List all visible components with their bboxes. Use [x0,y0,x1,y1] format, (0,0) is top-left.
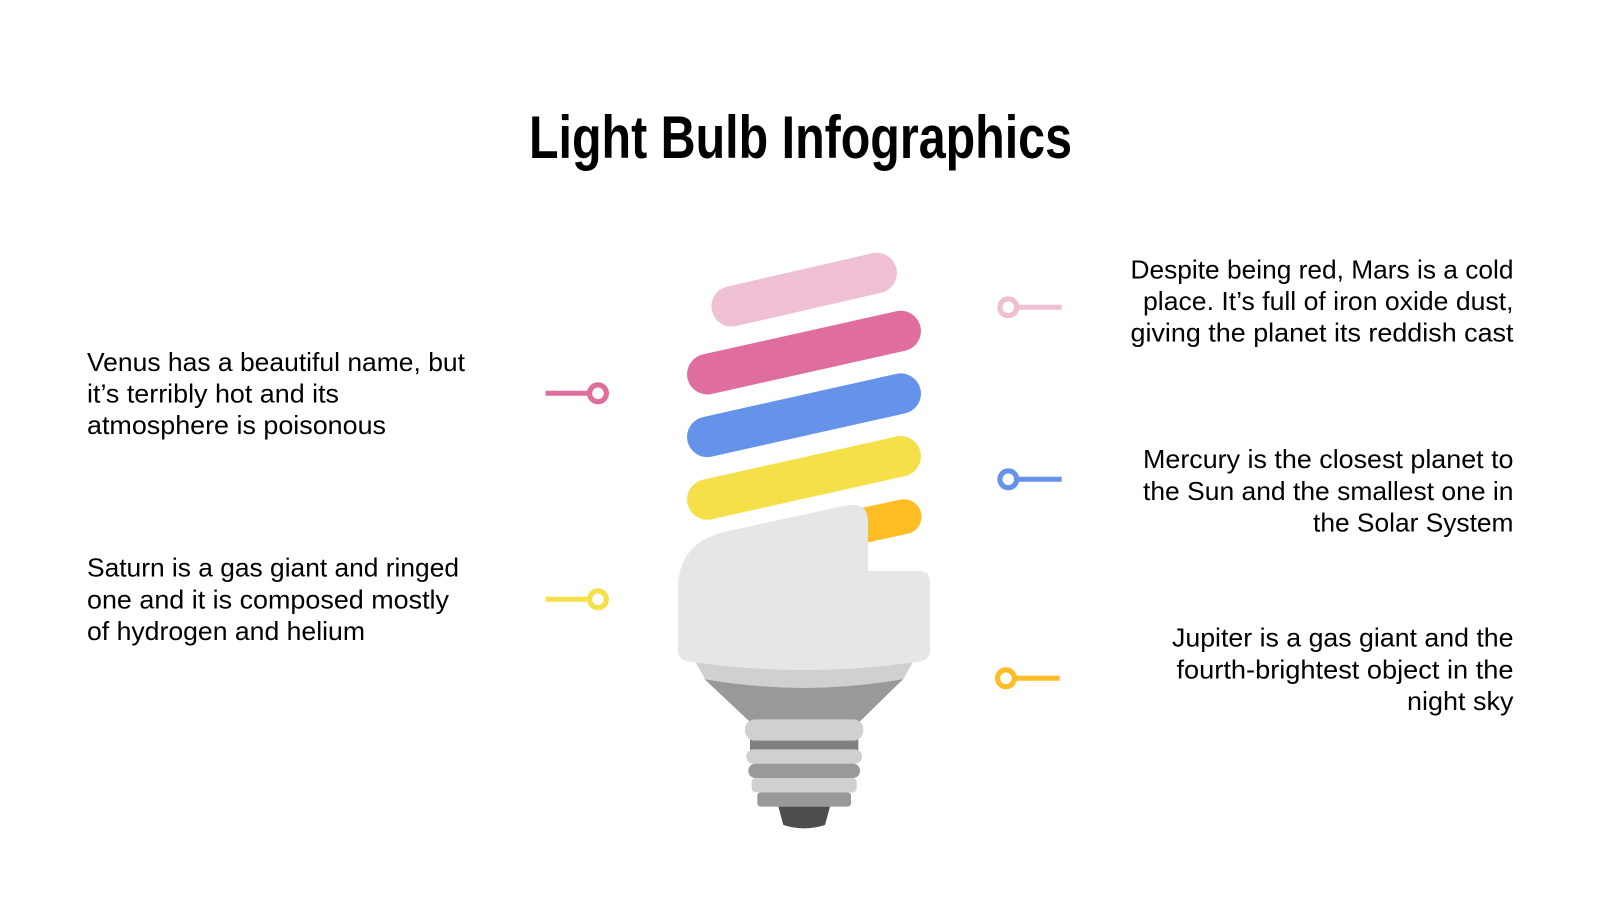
bulb coil: blue [707,394,901,437]
text block: Jupiter: fourth-brightest object in the [1176,656,1514,684]
text block: Jupiter: night sky [1407,688,1514,716]
light bulb illustration [678,273,930,828]
text block: Mars [1130,256,1514,348]
text block: Saturn: of hydrogen and helium [87,618,365,646]
connector: Saturn yellow [546,591,606,608]
connector: Mars light pink [1000,299,1062,316]
text block: Mercury [1143,446,1514,538]
bulb coil: pink [707,331,901,374]
text block: Mars: place. It’s full of iron oxide dust, [1143,288,1514,316]
connector: Venus pink [546,385,606,402]
text block: Mercury: the Sun and the smallest one in [1143,478,1514,506]
bulb coil: orange [840,517,904,530]
text block: Mercury: Mercury is the closest planet to [1143,446,1514,474]
title: Light Bulb Infographics [529,104,1072,171]
text block: Venus: atmosphere is poisonous [87,412,386,440]
text block: Mars: Despite being red, Mars is a cold [1130,256,1514,284]
text block: Venus: it’s terribly hot and its [87,380,339,408]
connector: Jupiter orange [998,670,1060,687]
text block: Mercury: the Solar System [1313,510,1514,538]
text block: Venus [87,349,465,440]
text block: Jupiter [1172,625,1514,716]
text block: Mars: giving the planet its reddish cast [1130,320,1514,348]
bulb coil: light pink [732,273,877,306]
text block: Saturn: Saturn is a gas giant and ringed [87,555,459,583]
text block: Saturn: one and it is composed mostly [87,586,449,614]
text block: Venus: Venus has a beautiful name, but [87,349,465,377]
connector: Mercury blue [1000,471,1062,488]
bulb coil: yellow [707,456,901,500]
bulb base [678,505,930,828]
text block: Jupiter: Jupiter is a gas giant and the [1172,625,1514,653]
text block: Saturn [87,555,459,646]
